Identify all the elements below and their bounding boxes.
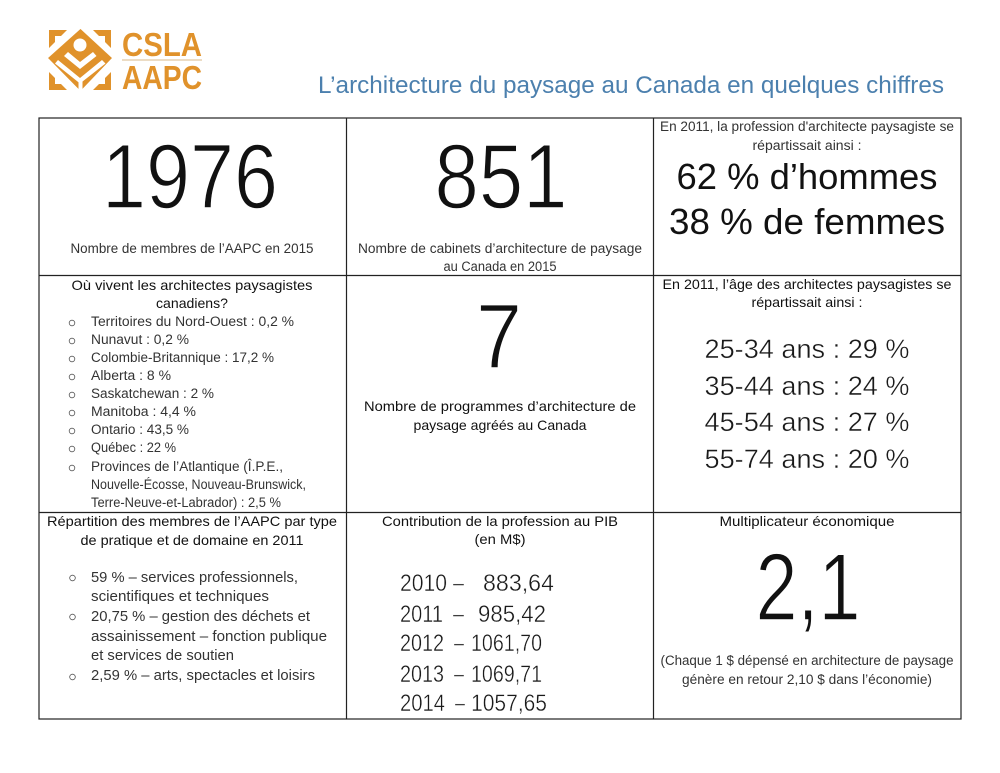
panel: GDP contribution: 2010	[400, 570, 447, 597]
panel: GDP contribution	[382, 513, 618, 717]
panel: members: Nombre de membres de l’AAPC en 2015	[70, 241, 314, 256]
panel: age: 25-34 ans : 29 %	[704, 334, 910, 364]
panel: firms: au Canada en 2015	[444, 259, 556, 274]
panel: where they live	[69, 277, 312, 510]
panel: practice types	[47, 513, 337, 684]
panel: gender: En 2011, la profession d'architecte paysagiste se	[660, 119, 954, 134]
province list: Provinces de l’Atlantique (Î.P.E.,	[91, 459, 283, 474]
practice list: assainissement – fonction publique	[91, 629, 327, 645]
panel: GDP contribution: 2014	[400, 690, 445, 717]
practice list	[70, 570, 327, 684]
panel: economic multiplier: Multiplicateur économique	[720, 513, 895, 529]
panel: members	[70, 126, 314, 256]
panel: age: répartissait ainsi :	[752, 294, 862, 310]
panel: economic multiplier: (Chaque 1 $ dépensé en architecture de paysage	[660, 653, 954, 668]
panel: age: 55-74 ans : 20 %	[704, 444, 910, 474]
practice list: scientifiques et techniques	[91, 589, 269, 605]
panel: programs: 7	[476, 286, 522, 388]
panel: members: 1976	[102, 126, 278, 228]
panel: GDP contribution: Contribution de la profession au PIB	[382, 513, 618, 529]
table grid	[39, 118, 961, 719]
province list: Ontario : 43,5 %	[91, 422, 189, 437]
panel: firms: Nombre de cabinets d’architecture de paysage	[358, 241, 642, 256]
panel: GDP contribution: –	[453, 601, 464, 628]
panel: firms: 851	[434, 126, 568, 228]
panel: programs	[364, 286, 636, 433]
panel: economic multiplier	[660, 513, 954, 687]
panel: practice types: Répartition des membres de l’AAPC par type	[47, 513, 337, 529]
panel: age: 35-44 ans : 24 %	[704, 371, 910, 401]
practice list: 59 % – services professionnels,	[91, 570, 298, 586]
title: L’architecture du paysage au Canada en quelques chiffres	[318, 72, 944, 99]
province list: Nunavut : 0,2 %	[91, 332, 189, 347]
panel: GDP contribution: 2012	[400, 630, 444, 657]
panel: where they live: Où vivent les architectes paysagistes	[72, 277, 312, 293]
panel: gender: répartissait ainsi :	[752, 138, 862, 153]
panel: GDP contribution: 1069,71	[471, 661, 542, 688]
panel: programs: paysage agréés au Canada	[414, 417, 587, 433]
province list: Nouvelle-Écosse, Nouveau-Brunswick,	[91, 477, 306, 492]
province list: Colombie-Britannique : 17,2 %	[91, 350, 274, 365]
practice list: et services de soutien	[91, 648, 234, 664]
panel: age: 45-54 ans : 27 %	[704, 407, 910, 437]
panel: gender	[660, 119, 954, 242]
province list	[69, 314, 306, 510]
practice list: 2,59 % – arts, spectacles et loisirs	[91, 668, 315, 684]
panel: firms	[358, 126, 642, 274]
province list: Saskatchewan : 2 %	[91, 386, 214, 401]
panel: GDP contribution: –	[453, 570, 464, 597]
province list: Manitoba : 4,4 %	[91, 404, 196, 419]
panel: practice types: de pratique et de domaine en 2011	[80, 532, 304, 548]
panel: GDP contribution: 1061,70	[471, 630, 542, 657]
panel: GDP contribution: 985,42	[478, 601, 546, 628]
panel: economic multiplier: génère en retour 2,10 $ dans l’économie)	[682, 672, 932, 687]
panel: programs: Nombre de programmes d’architecture de	[364, 398, 636, 414]
panel: GDP contribution: –	[455, 690, 465, 717]
panel: GDP contribution: –	[454, 661, 464, 688]
panel: GDP contribution: 2011	[400, 601, 443, 628]
panel: GDP contribution: 1057,65	[471, 690, 547, 717]
province list: Québec : 22 %	[91, 440, 176, 455]
panel: GDP contribution: –	[454, 630, 464, 657]
province list: Alberta : 8 %	[91, 368, 171, 383]
practice list: 20,75 % – gestion des déchets et	[91, 609, 310, 625]
panel: age: En 2011, l’âge des architectes paysagistes se	[662, 276, 952, 292]
province list: Terre-Neuve-et-Labrador) : 2,5 %	[91, 495, 281, 510]
panel: GDP contribution: 883,64	[483, 570, 554, 597]
panel: GDP contribution: (en M$)	[474, 531, 526, 547]
panel: economic multiplier: 2,1	[756, 534, 860, 641]
panel: age	[662, 276, 952, 474]
panel: gender: 62 % d’hommes	[676, 156, 938, 197]
panel: gender: 38 % de femmes	[669, 201, 945, 242]
logo: CSLA AAPC: CSLA	[122, 26, 202, 63]
province list: Territoires du Nord-Ouest : 0,2 %	[91, 314, 294, 329]
logo: CSLA AAPC	[47, 26, 202, 96]
panel: where they live: canadiens?	[156, 295, 228, 311]
panel: GDP contribution: 2013	[400, 661, 444, 688]
logo: CSLA AAPC: AAPC	[122, 59, 202, 96]
